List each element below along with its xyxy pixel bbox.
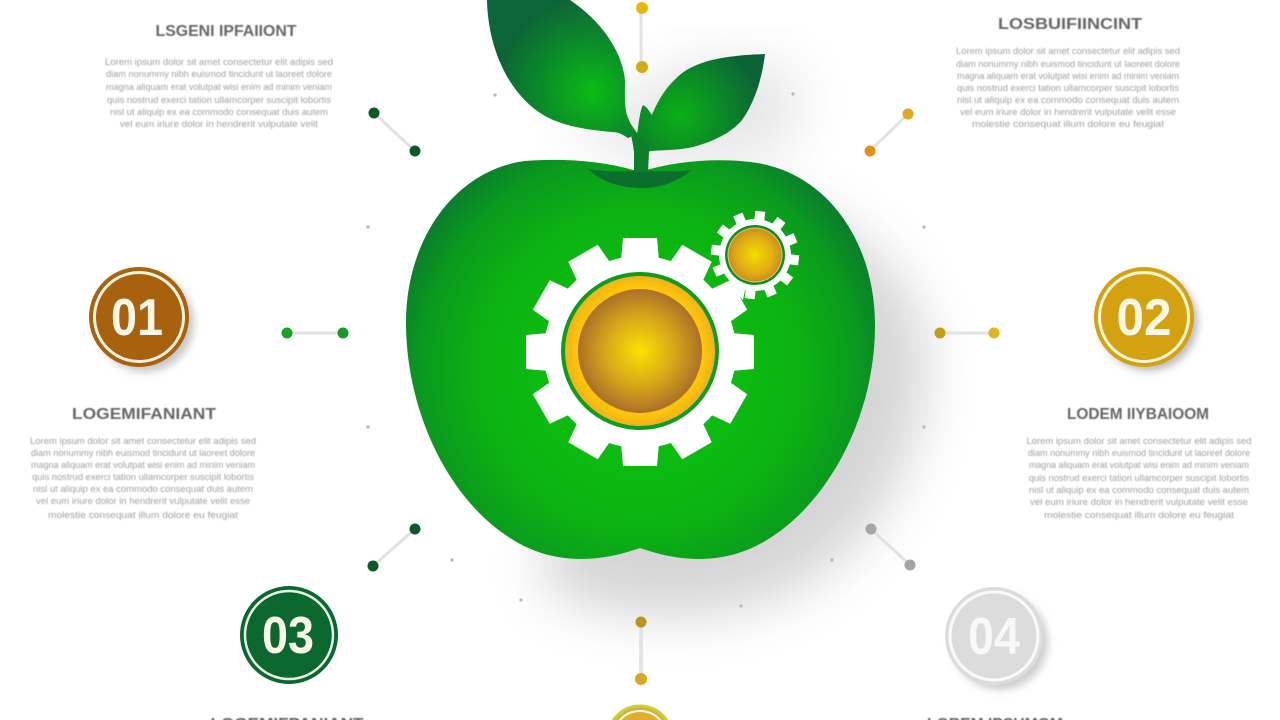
text block: right: nisl ut aliquip ex ea commodo consequat duis autem xyxy=(1029,485,1249,496)
badge 01 xyxy=(89,267,194,372)
connector: right xyxy=(934,328,1000,338)
text block: top right: molestie consequat illum dolore eu feugiat xyxy=(972,119,1164,130)
text block: right: Lorem ipsum dolor sit amet consectetur elit adipis sed xyxy=(1026,436,1252,447)
text block: top left: quis nostrud exerci tation ullamcorper suscipit lobortis xyxy=(107,95,331,106)
text block: top right: diam nonummy nibh euismod tincidunt ut laoreet dolore xyxy=(956,59,1180,70)
gear teeth xyxy=(526,238,754,466)
text block: right: LODEM IIYBAIOOM xyxy=(1067,406,1209,423)
text block: left: molestie consequat illum dolore eu feugiat xyxy=(48,510,238,521)
text block: top left: nisl ut aliquip ex ea commodo consequat duis autem xyxy=(110,107,328,118)
connector: bottom xyxy=(635,616,647,685)
small gear xyxy=(711,211,799,299)
text block: right: diam nonummy nibh euismod tincidunt ut laoreet dolore xyxy=(1028,448,1250,459)
text block: top right: LOSBUIFIINCINT xyxy=(998,16,1142,33)
left leaf xyxy=(487,0,637,138)
badge 01: 01 xyxy=(111,289,163,347)
connector: lower left xyxy=(368,524,420,572)
apple body xyxy=(406,160,875,559)
text block: left: vel eum iriure dolor in hendrerit vulputate velit esse xyxy=(36,496,250,507)
text block: right: vel eum iriure dolor in hendrerit vulputate velit esse xyxy=(1030,497,1248,508)
text block: top right: magna aliquam erat volutpat wisi enim ad minim veniam xyxy=(957,71,1179,82)
leaf shadow xyxy=(560,60,800,165)
badge 03: 03 xyxy=(262,607,314,665)
connector: lower right xyxy=(866,524,916,570)
text block: top left xyxy=(105,23,333,130)
text block: right: magna aliquam erat volutpat wisi enim ad minim veniam xyxy=(1029,460,1249,471)
text block: right: quis nostrud exerci tation ullamcorper suscipit lobortis xyxy=(1029,473,1249,484)
badge 03 xyxy=(240,586,338,684)
text block: left: LOGEMIFANIANT xyxy=(72,406,216,423)
badge 04: 04 xyxy=(968,608,1020,666)
connector: upper left xyxy=(368,108,420,156)
text block: left: magna aliquam erat volutpat wisi enim ad minim veniam xyxy=(31,460,255,471)
text block: top right: quis nostrud exerci tation ullamcorper suscipit lobortis xyxy=(957,83,1179,94)
connector: top xyxy=(636,2,648,73)
text block: top left: diam nonummy nibh euismod tincidunt ut laoreet dolore xyxy=(106,69,332,80)
text block: top right: nisl ut aliquip ex ea commodo consequat duis autem xyxy=(957,95,1179,106)
text block: left: nisl ut aliquip ex ea commodo consequat duis autem xyxy=(33,484,253,495)
text block: left: quis nostrud exerci tation ullamcorper suscipit lobortis xyxy=(32,472,254,483)
right leaf xyxy=(637,54,765,151)
small gear connector xyxy=(725,280,745,300)
decorative specks xyxy=(366,92,926,608)
text block: right: molestie consequat illum dolore eu feugiat xyxy=(1044,510,1234,521)
text block: left: diam nonummy nibh euismod tincidunt ut laoreet dolore xyxy=(31,448,255,459)
text block: top left: Lorem ipsum dolor sit amet consectetur elit adipis sed xyxy=(105,57,333,68)
text block: left xyxy=(30,406,256,521)
stem xyxy=(628,120,660,172)
text block: left: Lorem ipsum dolor sit amet consectetur elit adipis sed xyxy=(30,436,256,447)
connector: upper right xyxy=(864,108,914,156)
apple drop shadow xyxy=(540,191,926,617)
badge 02 xyxy=(1094,267,1198,371)
text block: top left: LSGENI IPFAIIONT xyxy=(156,23,297,40)
text block: top right: vel eum iriure dolor in hendrerit vulputate velit esse xyxy=(960,107,1176,118)
text block: right xyxy=(1026,406,1252,521)
icon: apple with leaves and gears xyxy=(406,0,875,559)
connector: left xyxy=(282,328,348,338)
text block: top right xyxy=(956,16,1180,130)
text block: top left: magna aliquam erat volutpat wisi enim ad minim veniam xyxy=(106,82,332,93)
badge 02: 02 xyxy=(1116,289,1172,347)
text block: top right: Lorem ipsum dolor sit amet consectetur elit adipis sed xyxy=(956,46,1180,57)
apple stem dip xyxy=(588,169,692,188)
text block: top left: vel eum iriure dolor in hendrerit vulputate velit xyxy=(120,119,318,130)
large gear xyxy=(526,238,754,466)
badge 05 cropped at bottom xyxy=(608,706,672,720)
badge 04 xyxy=(945,587,1048,690)
